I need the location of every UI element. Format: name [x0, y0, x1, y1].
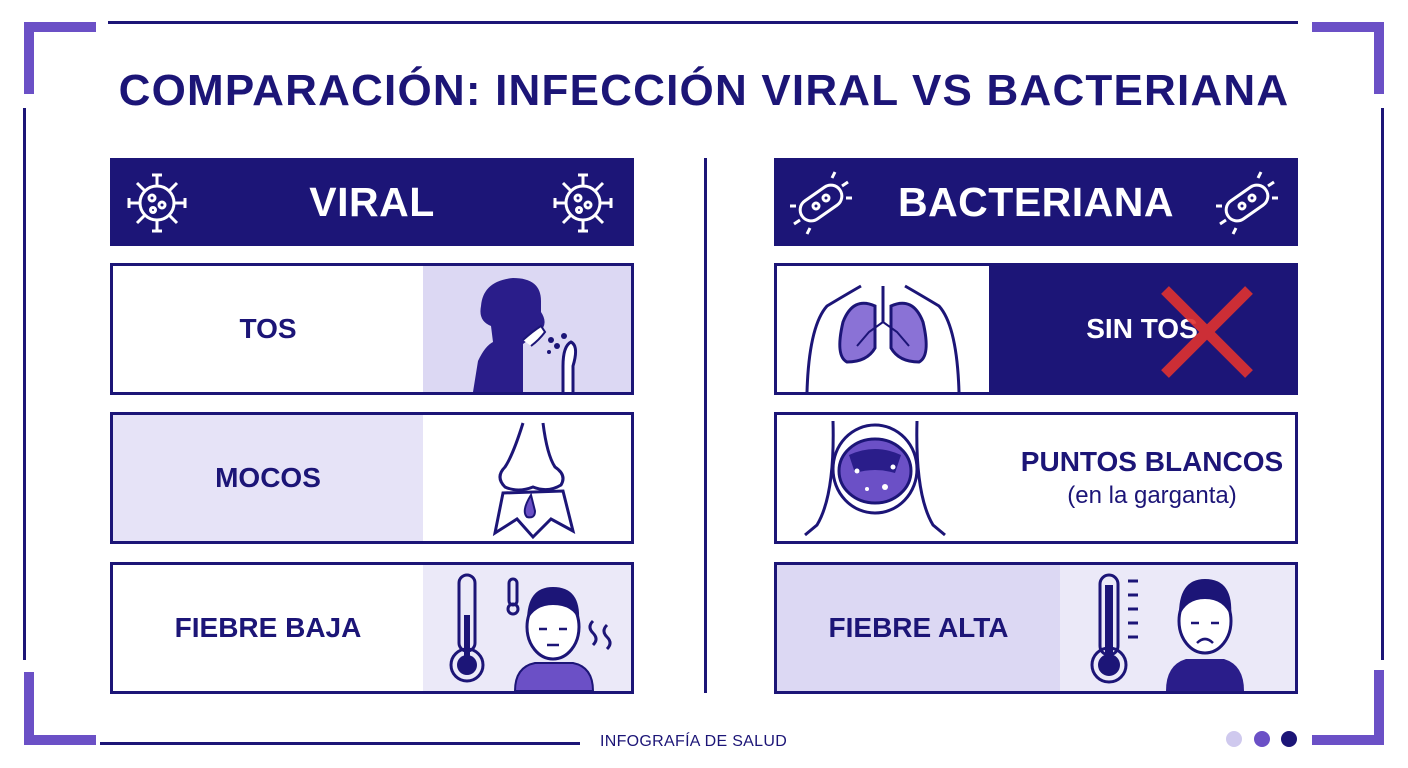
footer label: INFOGRAFÍA DE SALUD [600, 733, 787, 750]
icon: virus right [554, 174, 612, 232]
card: fiebre baja [110, 562, 634, 694]
icon: bacterium left [790, 171, 852, 235]
card: tos: TOS [239, 313, 297, 344]
card: tos [110, 263, 634, 395]
title: COMPARACIÓN: INFECCIÓN VIRAL VS BACTERIANA [119, 66, 1289, 115]
header: bacteriana: BACTERIANA [898, 178, 1174, 224]
card: fiebre baja: FIEBRE BAJA [175, 612, 361, 643]
header: viral [110, 158, 634, 246]
icon: thermometer and sick person [1060, 565, 1295, 691]
icon: thermometer and tired person [423, 565, 631, 691]
icon: throat [804, 421, 946, 536]
card: sin tos: SIN TOS [1086, 313, 1198, 344]
header: viral: VIRAL [309, 178, 435, 224]
icon: virus left [128, 174, 186, 232]
card: mocos [110, 412, 634, 544]
card: puntos blancos [774, 412, 1298, 544]
card: sin tos [774, 263, 1298, 395]
footer dots [1226, 731, 1297, 747]
card: mocos: MOCOS [215, 462, 321, 493]
card: fiebre alta: FIEBRE ALTA [829, 612, 1008, 643]
icon: bacterium right [1216, 171, 1278, 235]
header: bacteriana [774, 158, 1298, 246]
card: puntos blancos: PUNTOS BLANCOS [1021, 446, 1283, 477]
icon: coughing person [423, 266, 631, 392]
icon: red cross [1161, 286, 1253, 378]
card: puntos blancos: (en la garganta) [1067, 482, 1237, 509]
icon: nose with tissue [492, 422, 576, 540]
card: fiebre alta [774, 562, 1298, 694]
icon: lungs [806, 284, 960, 392]
